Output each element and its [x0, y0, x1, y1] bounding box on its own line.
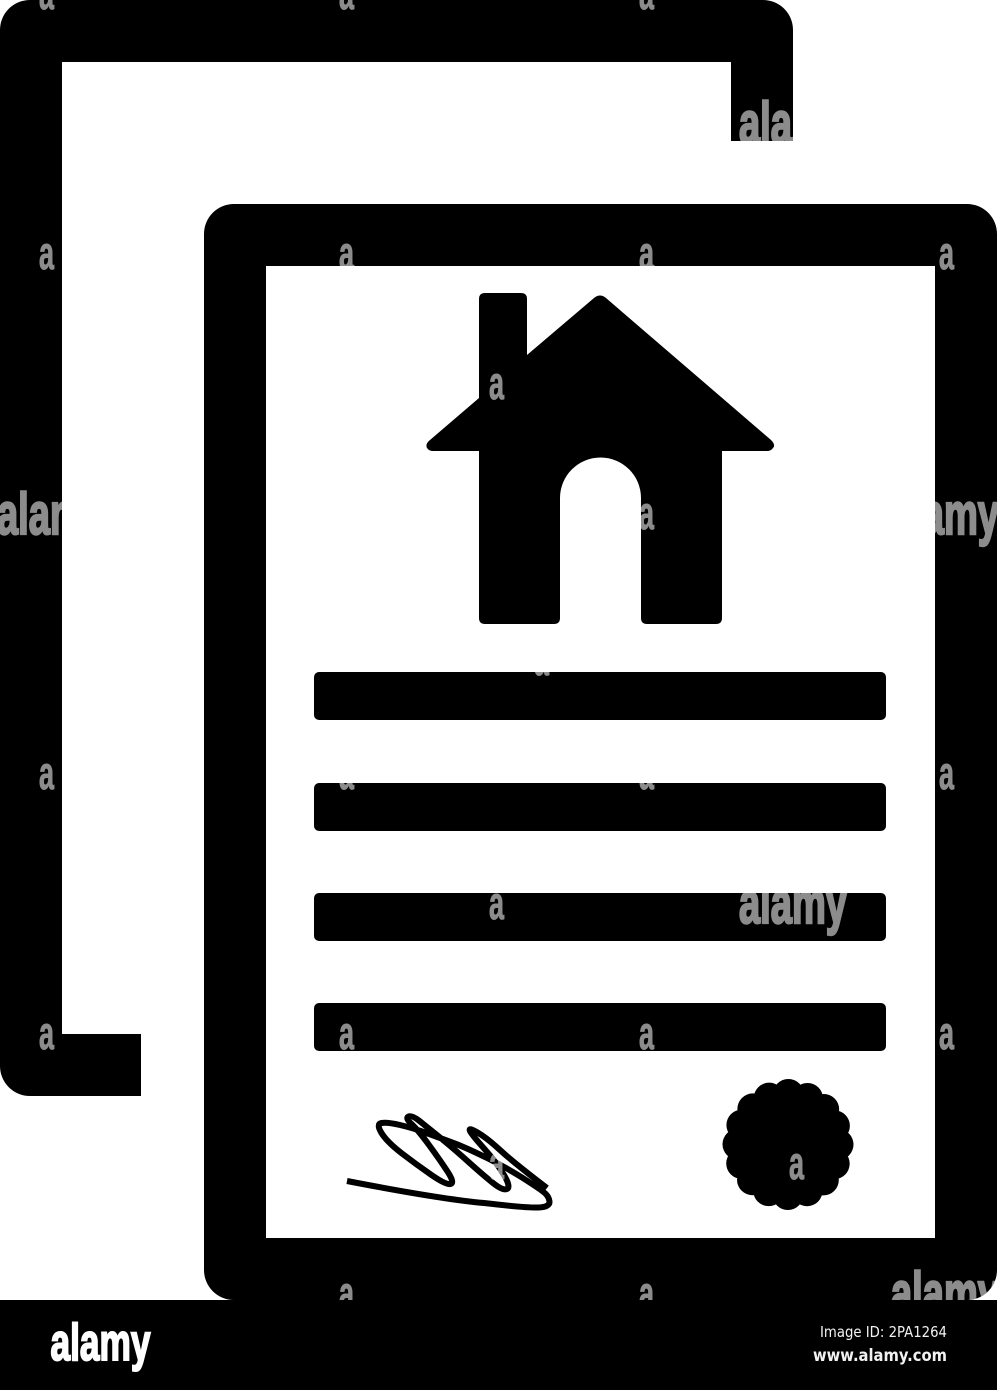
icon: scalloped seal	[733, 1090, 843, 1200]
watermark text: a	[639, 747, 654, 799]
watermark text: a	[789, 1137, 804, 1189]
watermark text: a	[939, 747, 954, 799]
image id: Image ID: 2PA1264	[820, 1323, 947, 1341]
watermark text: alamy	[739, 91, 847, 156]
watermark text: a	[39, 747, 54, 799]
watermark text: a	[534, 633, 549, 685]
watermark text: a	[639, 487, 654, 539]
watermark text: a	[39, 227, 54, 279]
website: www.alamy.com	[813, 1346, 947, 1366]
watermark text: a	[339, 227, 354, 279]
watermark text: alamy	[739, 871, 847, 936]
watermark text: a	[489, 1137, 504, 1189]
watermark text: a	[489, 357, 504, 409]
watermark text: a	[639, 1007, 654, 1059]
icon: front page frame	[204, 204, 997, 1300]
watermark text: a	[939, 1007, 954, 1059]
icon: back page outline	[0, 0, 793, 1096]
icon: signature scribble	[347, 1116, 550, 1208]
watermark text: a	[939, 227, 954, 279]
watermark text: a	[339, 747, 354, 799]
footer logo: alamy	[50, 1314, 151, 1372]
watermark text: alamy	[0, 482, 105, 547]
watermark text: a	[639, 1267, 654, 1319]
footer band	[0, 1300, 997, 1390]
watermark text: a	[489, 877, 504, 929]
text lines on document	[314, 672, 886, 1051]
watermark text: a	[339, 1267, 354, 1319]
watermark text: a	[39, 1007, 54, 1059]
watermark text: a	[639, 227, 654, 279]
watermark text: a	[339, 1007, 354, 1059]
icon: house with chimney	[426, 293, 774, 624]
